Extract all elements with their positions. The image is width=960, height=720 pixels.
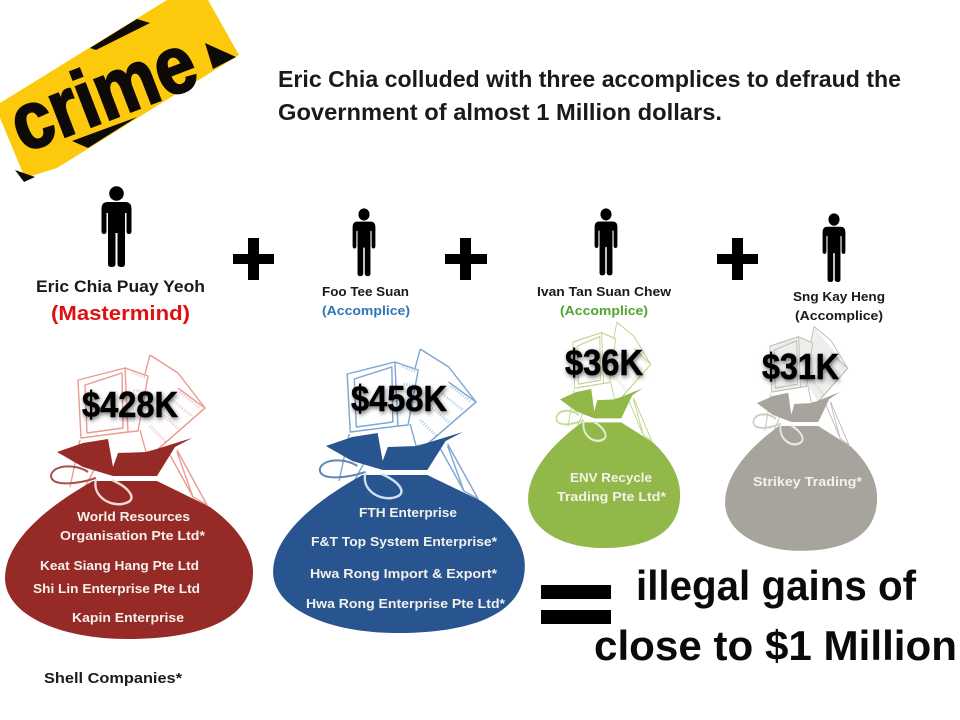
money bag: red: World Resources xyxy=(77,509,190,524)
money bag: blue: F&T Top System Enterprise* xyxy=(311,534,498,549)
money bag: red: Keat Siang Hang Pte Ltd xyxy=(40,558,199,573)
result text: illegal gains of xyxy=(636,562,917,609)
label: Foo role: (Accomplice) xyxy=(322,303,410,318)
title: Eric Chia colluded with three accomplices to defraud the xyxy=(278,66,901,92)
label: Mastermind: (Mastermind) xyxy=(51,303,190,325)
money bag: green xyxy=(528,322,680,548)
label: Sng role: (Accomplice) xyxy=(795,308,883,323)
money bag: red: Kapin Enterprise xyxy=(72,610,184,625)
result text: close to $1 Million xyxy=(594,622,957,669)
title xyxy=(278,66,901,125)
plus sign 3 xyxy=(717,238,758,280)
money bag: red: $428K xyxy=(82,384,178,425)
footnote: Shell Companies* xyxy=(44,671,182,687)
person: Foo Tee Suan xyxy=(353,208,375,276)
person: Sng Kay Heng xyxy=(823,213,845,282)
label: Eric Chia Puay Yeoh: Eric Chia Puay Yeoh xyxy=(36,277,205,296)
money bag: blue: Hwa Rong Enterprise Pte Ltd* xyxy=(306,596,506,611)
money bag: grey: Strikey Trading* xyxy=(753,474,863,489)
money bag: blue: Hwa Rong Import & Export* xyxy=(310,566,498,581)
money bag: blue xyxy=(273,349,525,633)
person: Eric Chia Puay Yeoh xyxy=(102,186,132,267)
money bag: grey xyxy=(725,326,877,551)
label: Ivan Tan Suan Chew: Ivan Tan Suan Chew xyxy=(537,284,672,299)
money bag: red: Shi Lin Enterprise Pte Ltd xyxy=(33,581,200,596)
title: Government of almost 1 Million dollars. xyxy=(278,99,722,125)
label: Foo Tee Suan: Foo Tee Suan xyxy=(322,284,409,299)
equals sign xyxy=(541,585,611,624)
label: Sng Kay Heng: Sng Kay Heng xyxy=(793,289,885,304)
money bag: blue: FTH Enterprise xyxy=(359,505,457,520)
money bag: green: $36K xyxy=(565,342,643,383)
money bag: red xyxy=(5,355,253,639)
money bag: green: ENV Recycle xyxy=(570,470,652,485)
plus sign 2 xyxy=(445,238,487,280)
label: Ivan role: (Accomplice) xyxy=(560,303,648,318)
money bag: green: Trading Pte Ltd* xyxy=(557,489,667,504)
money bag: grey: $31K xyxy=(762,346,839,387)
result text xyxy=(594,562,957,669)
crime tape banner: crime xyxy=(0,17,209,170)
person: Ivan Tan Suan Chew xyxy=(595,208,617,275)
money bag: red: Organisation Pte Ltd* xyxy=(60,528,206,543)
money bag: blue: $458K xyxy=(351,378,447,419)
plus sign 1 xyxy=(233,238,274,280)
